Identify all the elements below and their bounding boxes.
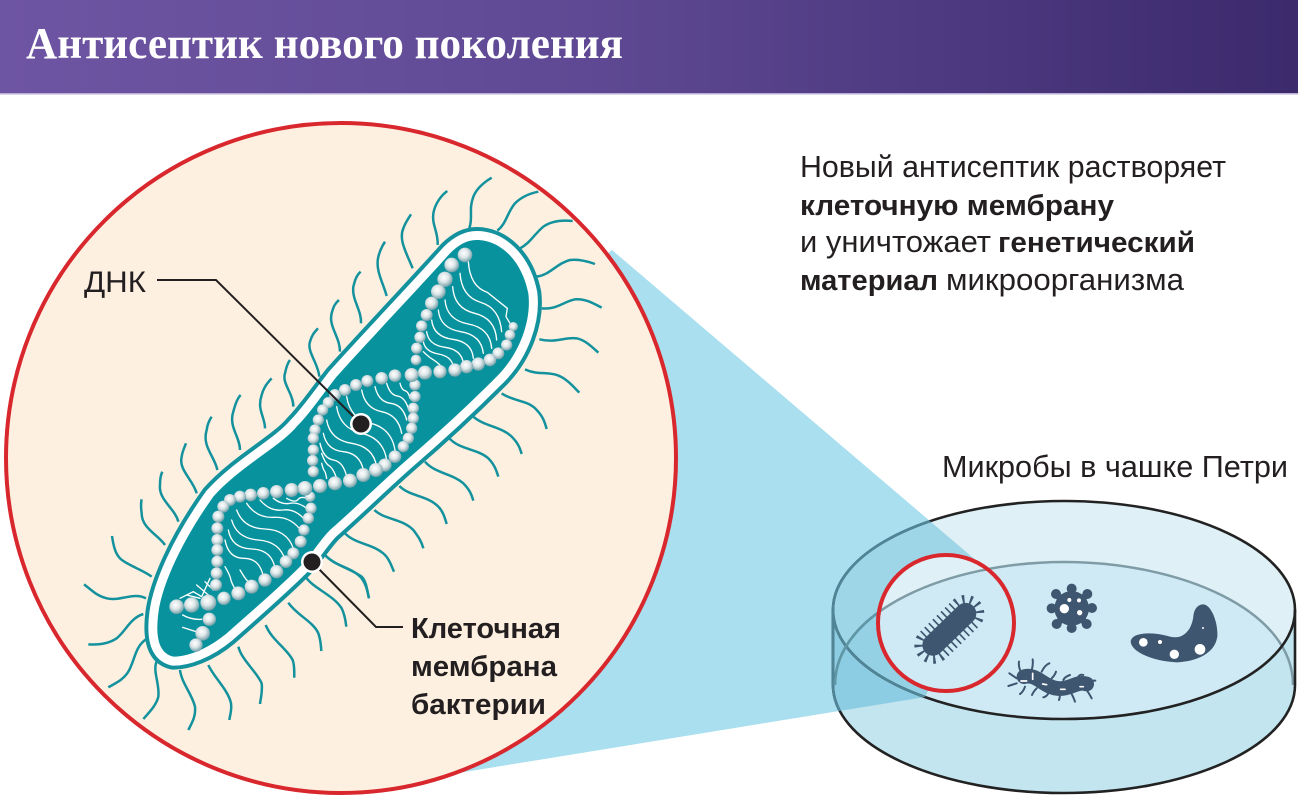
dish lid (833, 501, 1295, 719)
small red circle highlight (876, 553, 1016, 693)
callout: cell membrane: мембрана (411, 651, 558, 683)
description text (800, 149, 1226, 297)
DNA beads (169, 248, 518, 652)
title: Антисептик нового поколения (26, 19, 623, 68)
description text: материал (800, 265, 938, 297)
header band (0, 0, 1298, 94)
description text: микроорганизма (946, 262, 1185, 297)
bacterium cell (157, 240, 529, 657)
cell membrane and cytoplasm (157, 240, 529, 657)
zoom beam (462, 250, 975, 772)
large circle magnified view (6, 123, 676, 793)
dish body (833, 610, 1295, 793)
description text: клеточную мембрану (800, 190, 1114, 222)
bacterium flagella (84, 178, 602, 730)
callout: cell membrane: бактерии (411, 689, 546, 721)
callout: cell membrane (301, 551, 561, 721)
petri dish (833, 501, 1295, 793)
description text: генетический (998, 227, 1195, 259)
DNA rungs (180, 262, 510, 632)
description text: и уничтожает (800, 224, 991, 259)
callout: DNA: ДНК (84, 266, 147, 299)
microbe: worm (1008, 659, 1095, 702)
microbes (918, 584, 1217, 702)
callout: DNA (84, 266, 372, 435)
dish outlines (833, 610, 1295, 793)
microbe: crescent (1131, 604, 1217, 662)
callout: cell membrane: Клеточная (411, 613, 561, 645)
dish caption: Микробы в чашке Петри (942, 449, 1288, 484)
dish inner rim (835, 562, 1293, 685)
microbe: virus (1047, 584, 1097, 633)
description text: Новый антисептик растворяет (800, 149, 1226, 184)
microbe: rod bacterium (918, 599, 981, 660)
